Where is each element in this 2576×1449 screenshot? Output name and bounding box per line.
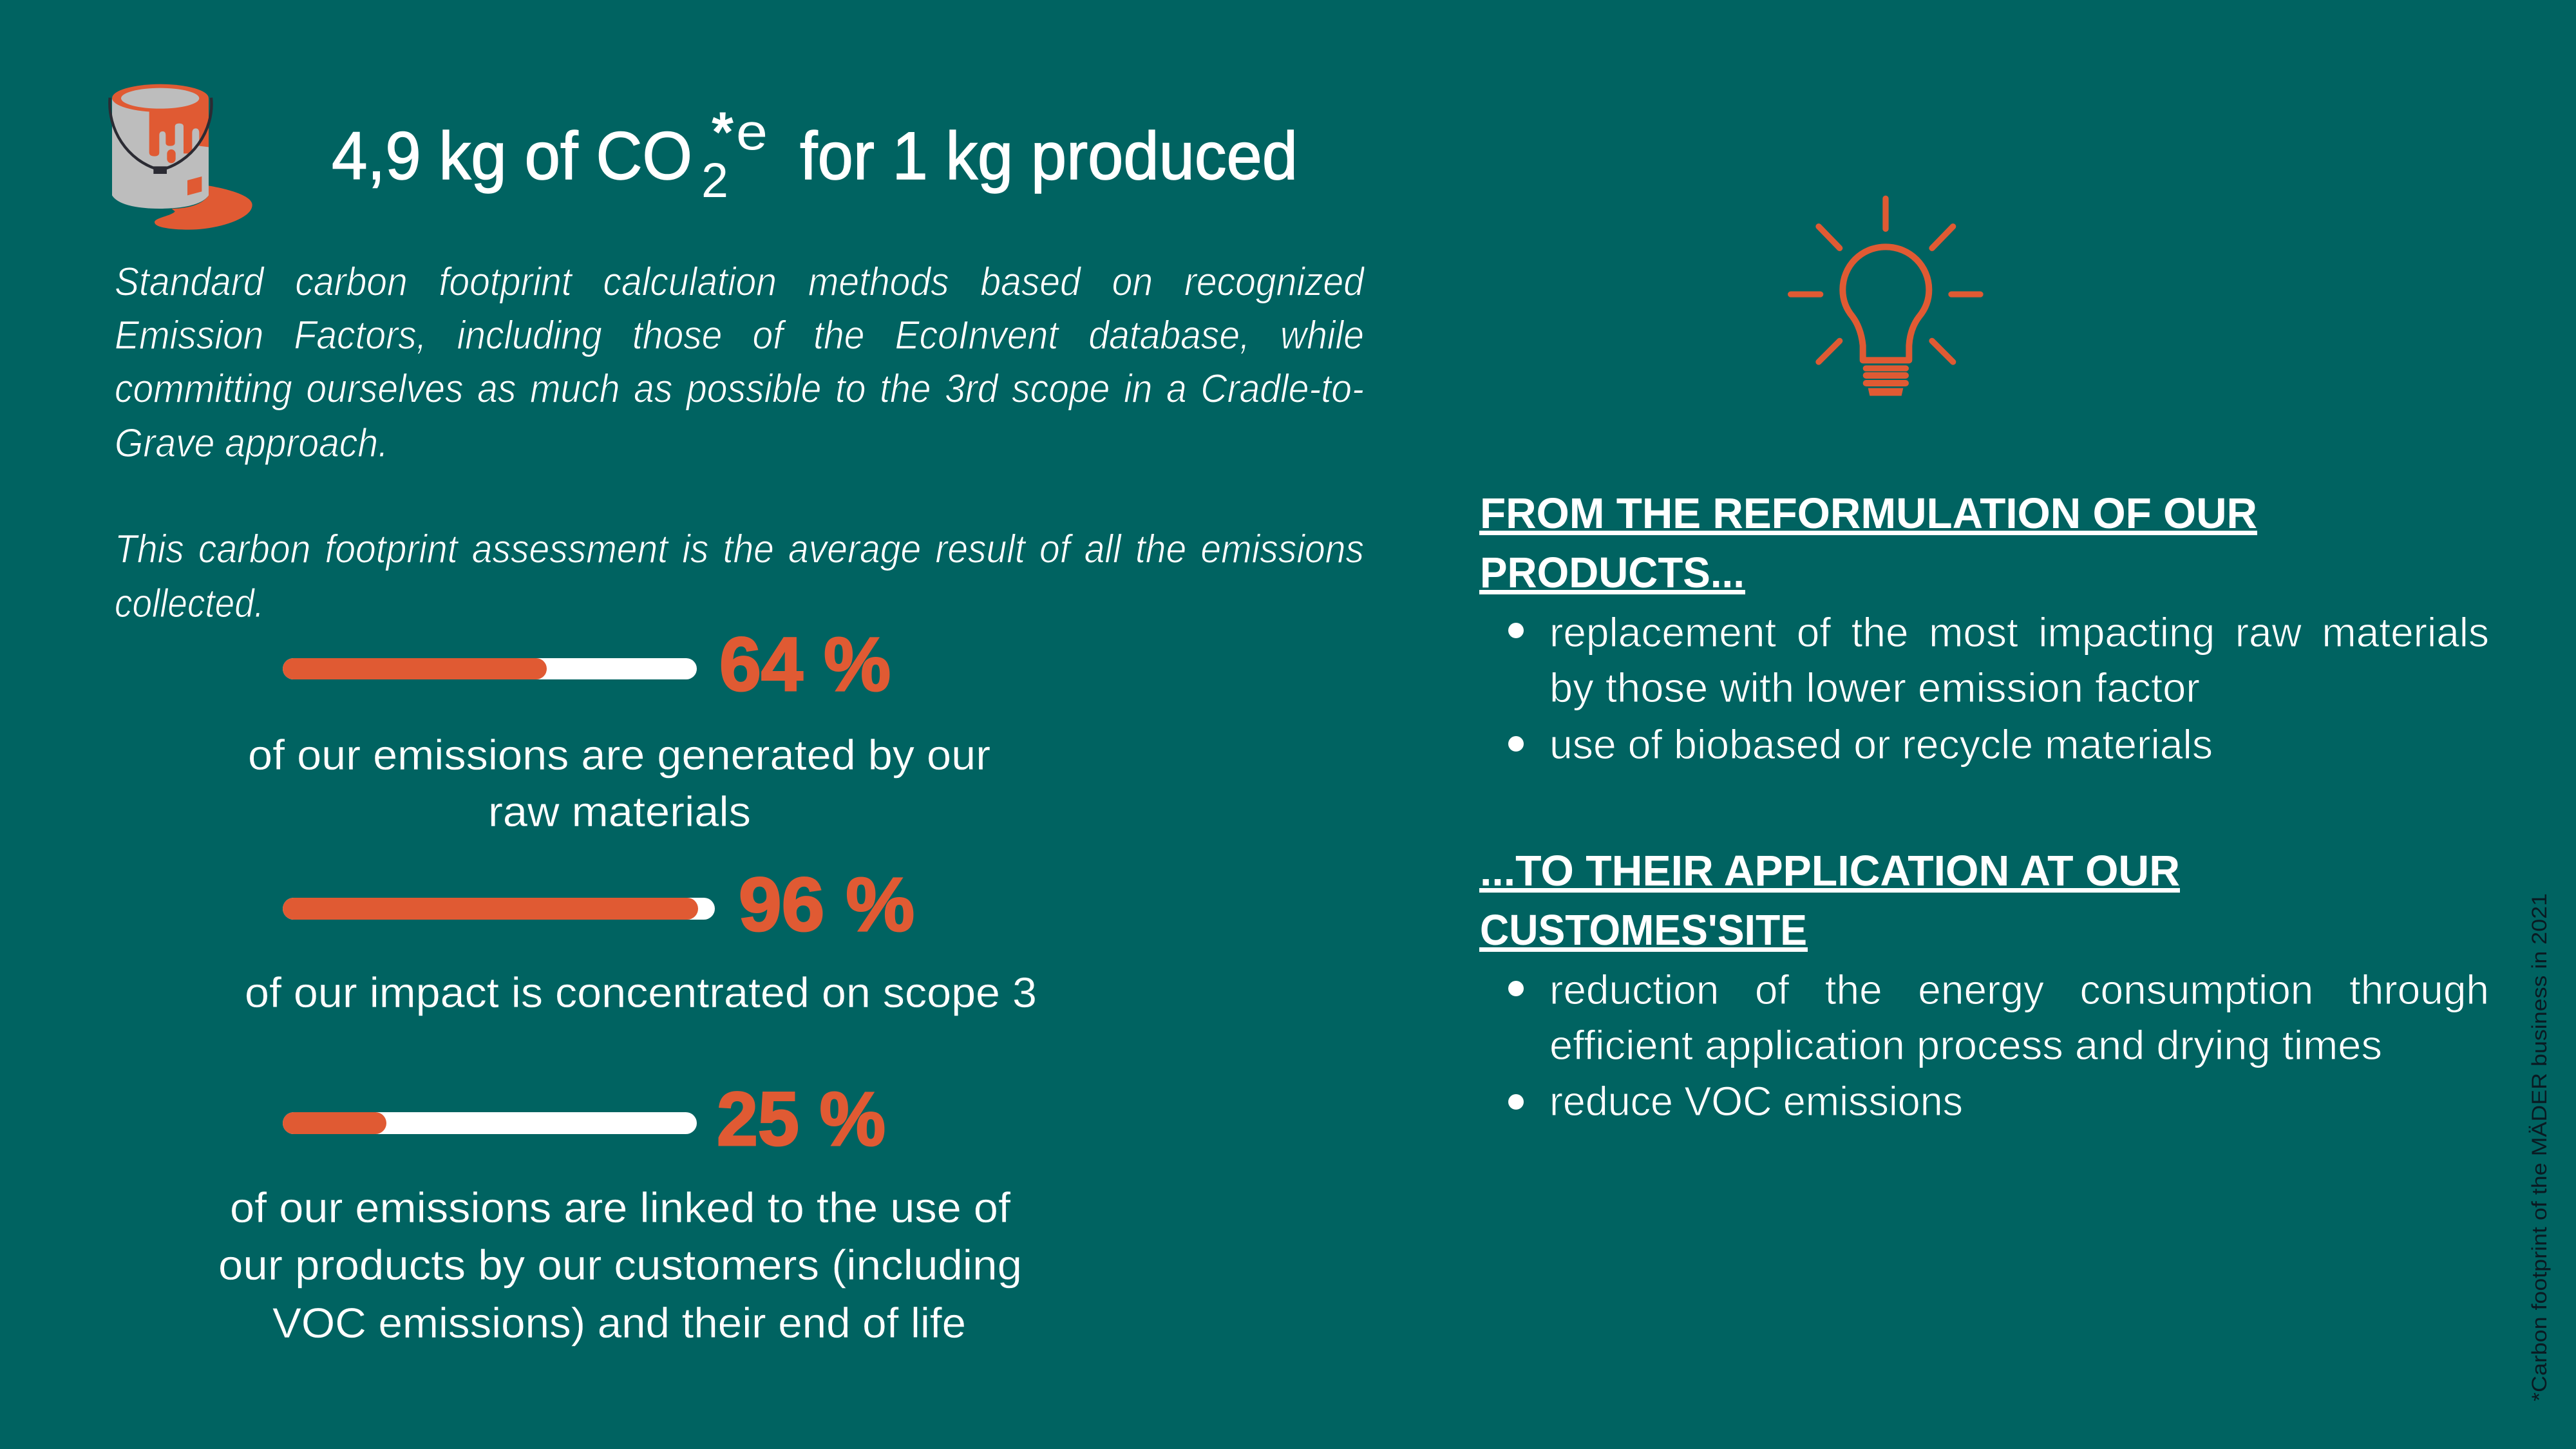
section: reformulation — [1479, 489, 2489, 768]
paint rim — [112, 84, 209, 112]
title: for 1 kg produced — [800, 118, 1298, 194]
bullet list: application: efficient application process and drying times — [1549, 1022, 2382, 1068]
panel: right column — [1479, 198, 2489, 1124]
panel: left column — [109, 84, 1364, 1347]
intro text block: Emission Factors, including those of the EcoInvent database, while — [115, 313, 1364, 358]
value 64: 64 % — [719, 622, 891, 707]
bullet list: reformulation: use of biobased or recycle materials — [1549, 721, 2213, 768]
heading: reformulation: FROM THE REFORMULATION OF OUR — [1480, 489, 2257, 538]
heading: reformulation — [1479, 489, 2257, 597]
bucket body — [112, 99, 209, 209]
paint drips — [149, 99, 209, 156]
icon: paint bucket — [109, 84, 252, 230]
caption 25: VOC emissions) and their end of life — [272, 1299, 966, 1347]
section: application — [1479, 847, 2489, 1124]
bullet list: reformulation — [1508, 605, 2489, 768]
heading: reformulation: PRODUCTS... — [1480, 549, 1745, 597]
caption 25: our products by our customers (including — [218, 1241, 1022, 1289]
intro text block: This carbon footprint assessment is the average result of all the emissions — [115, 527, 1364, 572]
value 96: 96 % — [739, 862, 914, 947]
stat: 25 percent — [218, 1077, 1022, 1347]
progress bar 25 — [283, 1112, 697, 1134]
paint puddle — [155, 185, 252, 230]
caption 64: of our emissions are generated by our — [248, 731, 990, 779]
stat: 64 percent — [248, 622, 990, 835]
progress bar 96 — [283, 898, 715, 920]
handle clasp — [153, 166, 167, 174]
intro text block: Grave approach. — [115, 421, 388, 466]
bullet list: application — [1508, 963, 2489, 1124]
bucket interior — [121, 88, 199, 109]
paint drop — [167, 149, 176, 163]
intro text block: Standard carbon footprint calculation methods based on recognized — [115, 260, 1364, 304]
stat: 96 percent — [245, 862, 1037, 1016]
value 25: 25 % — [717, 1077, 886, 1162]
caption 64: raw materials — [488, 788, 751, 835]
title: e — [736, 103, 768, 160]
intro text block: committing ourselves as much as possible to the 3rd scope in a Cradle-to- — [115, 367, 1364, 411]
title: * — [712, 100, 734, 164]
caption 25: of our emissions are linked to the use of — [230, 1184, 1011, 1231]
bullet list: application: reduce VOC emissions — [1549, 1078, 1963, 1124]
footnote: *Carbon footprint of the MÄDER business in 2021 — [2528, 893, 2551, 1401]
intro text block — [115, 255, 1364, 626]
bulb outline — [1842, 247, 1929, 360]
bullet list: reformulation: by those with lower emission factor — [1549, 665, 2200, 711]
light rays — [1791, 198, 1980, 362]
icon: light bulb — [1791, 198, 1980, 396]
bullet list: reformulation: replacement of the most impacting raw materials — [1549, 609, 2489, 656]
title: 4,9 kg of CO — [332, 118, 692, 194]
caption 25 — [218, 1184, 1022, 1347]
heading: application: ...TO THEIR APPLICATION AT OUR — [1480, 847, 2180, 895]
caption 64 — [248, 731, 990, 835]
caption 96: of our impact is concentrated on scope 3 — [245, 969, 1037, 1016]
heading: application — [1479, 847, 2180, 954]
bullet list: application: reduction of the energy consumption through — [1549, 967, 2489, 1013]
progress bar 64 — [283, 658, 697, 679]
bulb base — [1863, 365, 1909, 396]
title — [332, 100, 1298, 208]
title: 2 — [701, 153, 728, 208]
intro text block: collected. — [115, 582, 264, 626]
heading: application: CUSTOMES'SITE — [1480, 906, 1807, 954]
bucket label — [187, 176, 202, 195]
bucket handle — [109, 98, 212, 170]
